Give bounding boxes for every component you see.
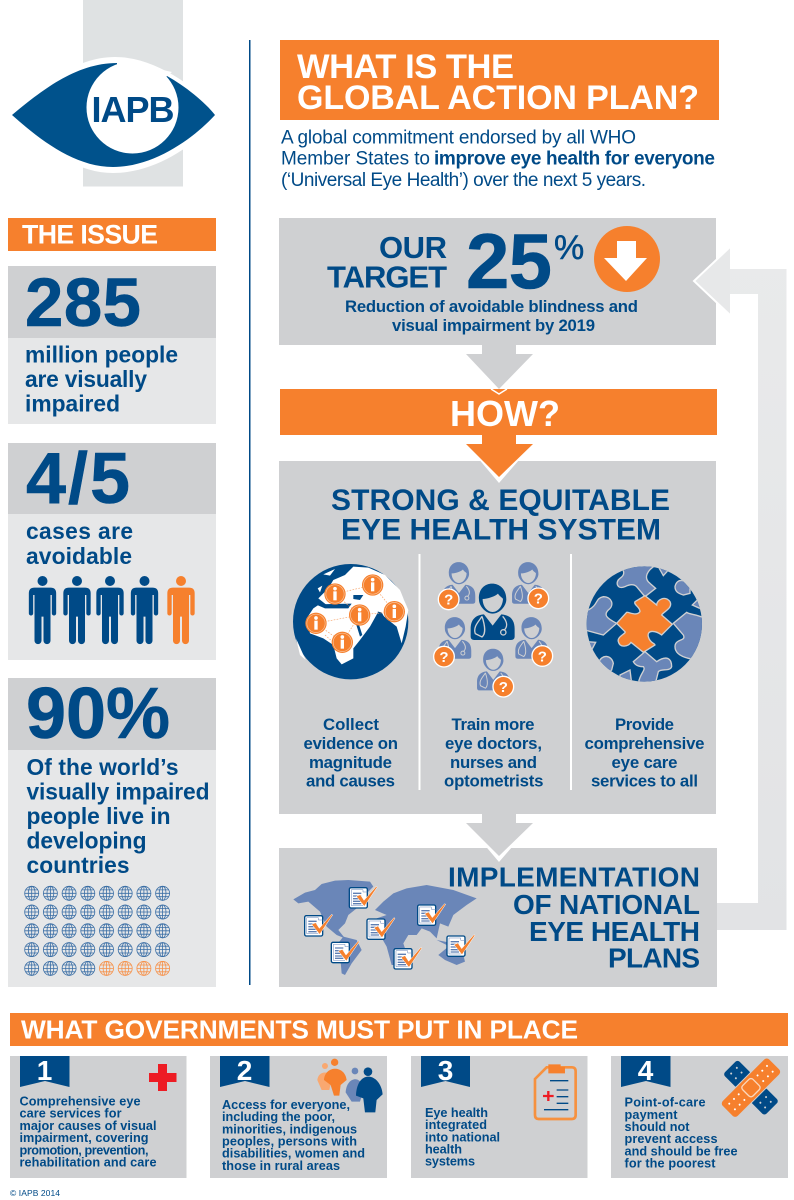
panel: 285 million: 285: [25, 264, 141, 341]
panel: 285 million: million people: [25, 342, 178, 368]
ribbon 1: 1: [37, 1055, 52, 1086]
banner: what governments must put in place: [10, 1013, 788, 1046]
panel: 4/5 avoidable: 4/5: [26, 439, 130, 519]
panel: implementation: PLANS: [608, 942, 700, 974]
ribbon 4: 4: [638, 1055, 654, 1086]
return arrow head outline: [694, 247, 730, 315]
column: provide services: [584, 715, 704, 790]
intro text: [281, 128, 715, 191]
logo backdrop: [83, 0, 183, 186]
card 1: promotion, prevention,: [20, 1143, 148, 1157]
intro text: improve eye health for everyone: [434, 148, 715, 170]
card 2: [210, 1055, 387, 1178]
column: train more: eye doctors,: [445, 734, 542, 753]
column: train more: Train more: [452, 715, 534, 734]
card 2: disabilities, women and: [222, 1147, 365, 1161]
return arrow head overlap: [694, 247, 730, 315]
card 2: those in rural areas: [222, 1159, 340, 1173]
card 4: payment: [624, 1108, 678, 1122]
card 2: including the poor,: [222, 1110, 335, 1124]
icon: globe with information markers: [293, 564, 408, 679]
column: collect evidence: [304, 715, 398, 790]
card 4: prevent access: [624, 1132, 718, 1146]
card 3: into national: [425, 1130, 500, 1144]
panel: the issue heading: THE ISSUE: [22, 220, 158, 250]
panel: strong and equitable eye health system: [279, 461, 716, 814]
panel: 90 percent: countries: [26, 852, 130, 878]
panel: 90 percent: developing: [26, 828, 146, 854]
card 4: Point-of-care: [624, 1096, 706, 1110]
how banner: HOW?: [450, 393, 560, 434]
column: provide services: comprehensive: [584, 734, 704, 753]
panel: 90 percent: [8, 674, 216, 987]
card 3: health: [425, 1142, 462, 1156]
column: collect evidence: and causes: [306, 772, 395, 790]
intro text: A global commitment endorsed by all WHO: [281, 128, 636, 148]
ribbon 1: [20, 1055, 70, 1087]
panel: implementation: EYE HEALTH: [529, 916, 700, 947]
IAPB eye logo: [4, 57, 222, 173]
title: [280, 40, 719, 120]
ribbon 4: [621, 1055, 670, 1087]
panel: 285 million: are visually: [25, 366, 147, 392]
panel: implementation: [279, 848, 717, 987]
card 1: [10, 1055, 186, 1178]
panel: 90 percent: Of the world’s: [26, 754, 178, 780]
card 1: care services for: [20, 1107, 122, 1121]
card 3: [411, 1055, 588, 1178]
return arrow: [694, 247, 786, 930]
icon: clipboard: [535, 1064, 576, 1119]
card 1: major causes of visual: [20, 1119, 156, 1133]
card 1: Comprehensive eye: [20, 1094, 140, 1108]
panel: 4/5 avoidable: cases are: [26, 518, 133, 544]
panel: our target: %: [554, 229, 584, 267]
copyright: © IAPB 2014: [10, 1188, 60, 1198]
column: train more: [444, 715, 544, 790]
panel: implementation: OF NATIONAL: [513, 889, 700, 920]
panel: our target: TARGET: [327, 260, 447, 294]
panel: the issue heading: [8, 218, 216, 251]
panel: 4/5 avoidable: avoidable: [26, 543, 132, 569]
card 4: for the poorest: [624, 1156, 716, 1170]
panel: our target: 25: [466, 217, 552, 305]
panel: our target: Reduction of avoidable blindness and: [345, 297, 638, 316]
card 1: impairment, covering: [20, 1131, 148, 1145]
column: provide services: eye care: [612, 753, 678, 772]
icon: group of people: [317, 1059, 383, 1112]
intro text: (‘Universal Eye Health’) over the next 5 years.: [281, 170, 646, 191]
globe grid icons: [25, 886, 170, 975]
panel: 90 percent: people live in: [26, 803, 170, 829]
panel: 285 million: impaired: [25, 390, 120, 416]
title: GLOBAL ACTION PLAN?: [297, 79, 699, 117]
icon: red cross: [149, 1064, 176, 1091]
icon: puzzle: [585, 565, 705, 685]
ribbon 2: 2: [237, 1055, 252, 1086]
panel: our target: [279, 217, 716, 345]
panel: 90 percent: 90%: [26, 674, 170, 754]
panel: strong and equitable eye health system: STRONG & EQUITABLE: [331, 484, 670, 517]
ribbon 3: [421, 1055, 470, 1087]
card 4: [611, 1055, 788, 1178]
panel: our target: visual impairment by 2019: [392, 316, 595, 335]
card 2: Access for everyone,: [222, 1098, 350, 1112]
people icons: [29, 576, 195, 644]
column: provide services: Provide: [615, 715, 674, 734]
column: train more: nurses and: [450, 753, 537, 772]
column: collect evidence: Collect: [323, 715, 379, 734]
column: collect evidence: evidence on: [304, 734, 398, 753]
how banner: [280, 389, 717, 435]
card 3: systems: [425, 1155, 475, 1169]
card 2: peoples, persons with: [222, 1134, 357, 1148]
icon: down arrow: [594, 226, 660, 292]
card 4: should not: [624, 1120, 690, 1134]
icon: bandage: [720, 1056, 782, 1119]
card 3: Eye health: [425, 1106, 488, 1120]
panel: our target: OUR: [379, 230, 447, 265]
panel: strong and equitable eye health system: EYE HEALTH SYSTEM: [341, 514, 661, 546]
card 2: minorities, indigenous: [222, 1122, 357, 1136]
panel: 4/5 avoidable: [8, 439, 216, 660]
column: train more: optometrists: [444, 772, 544, 790]
card 1: rehabilitation and care: [20, 1156, 156, 1170]
vertical divider line: [249, 40, 250, 985]
icon: world map with checked documents: [293, 880, 477, 975]
panel: implementation: IMPLEMENTATION: [448, 862, 700, 892]
ribbon 3: 3: [438, 1055, 453, 1086]
card 4: and should be free: [624, 1144, 738, 1158]
panel: 90 percent: visually impaired: [26, 778, 210, 804]
arrow: system to implementation: [466, 814, 533, 862]
panel: 285 million: [8, 264, 216, 424]
intro text: Member States to: [281, 148, 430, 170]
arrow: target to how: [466, 345, 533, 389]
column: provide services: services to all: [591, 772, 698, 790]
column: collect evidence: magnitude: [309, 753, 392, 772]
icon: doctors: [434, 562, 553, 697]
IAPB eye logo: IAPB: [92, 89, 174, 130]
ribbon 2: [220, 1055, 270, 1087]
card 3: integrated: [425, 1118, 487, 1132]
title: WHAT IS THE: [297, 48, 514, 86]
arrow: how to strong system: [466, 435, 533, 483]
banner: what governments must put in place: WHAT GOVERNMENTS MUST PUT IN PLACE: [21, 1014, 578, 1044]
